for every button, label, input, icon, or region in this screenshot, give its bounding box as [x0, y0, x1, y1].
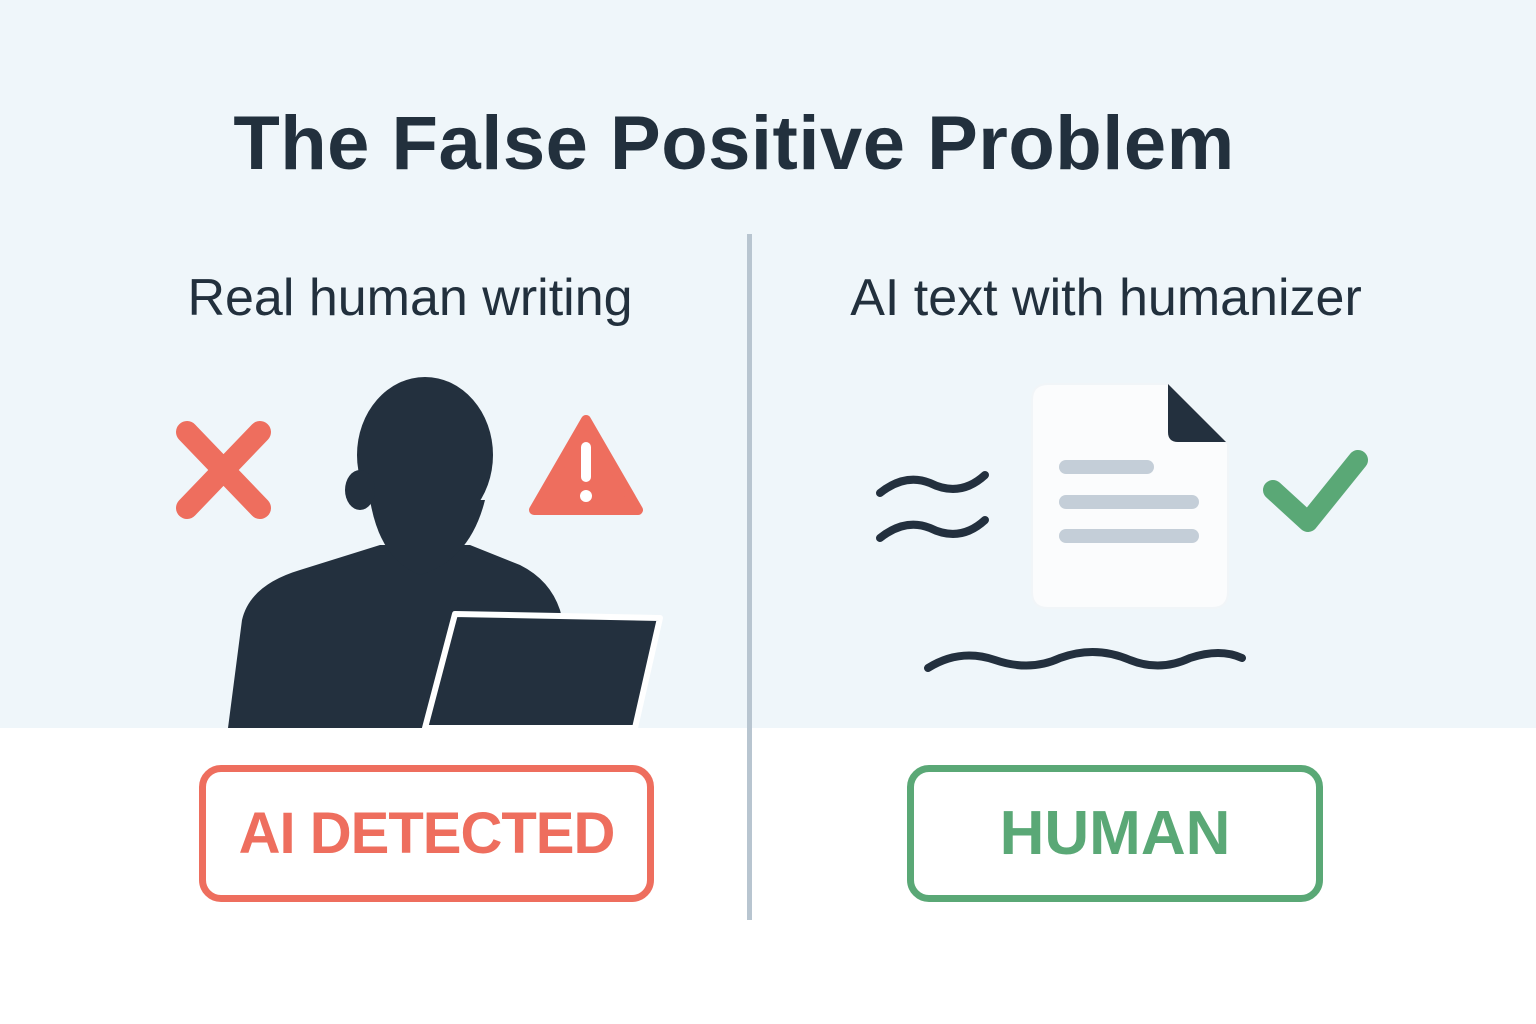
illustration: right [876, 384, 1368, 672]
divider [747, 234, 752, 920]
label: AI DETECTED [199, 765, 654, 902]
icon: warning [534, 420, 638, 510]
label: HUMAN: HUMAN [1000, 799, 1230, 868]
subtitle: left: Real human writing [187, 269, 633, 327]
subtitle: right: AI text with humanizer [850, 269, 1362, 327]
icon: person with laptop [228, 377, 660, 728]
icon: red X [187, 432, 260, 508]
label: AI DETECTED: AI DETECTED [239, 801, 614, 866]
title: The False Positive Problem [233, 101, 1235, 186]
label: HUMAN [907, 765, 1323, 902]
icon: check [1273, 460, 1358, 522]
icon: waves [880, 475, 1242, 668]
illustration: left [176, 377, 663, 728]
icon: document [1032, 384, 1228, 608]
